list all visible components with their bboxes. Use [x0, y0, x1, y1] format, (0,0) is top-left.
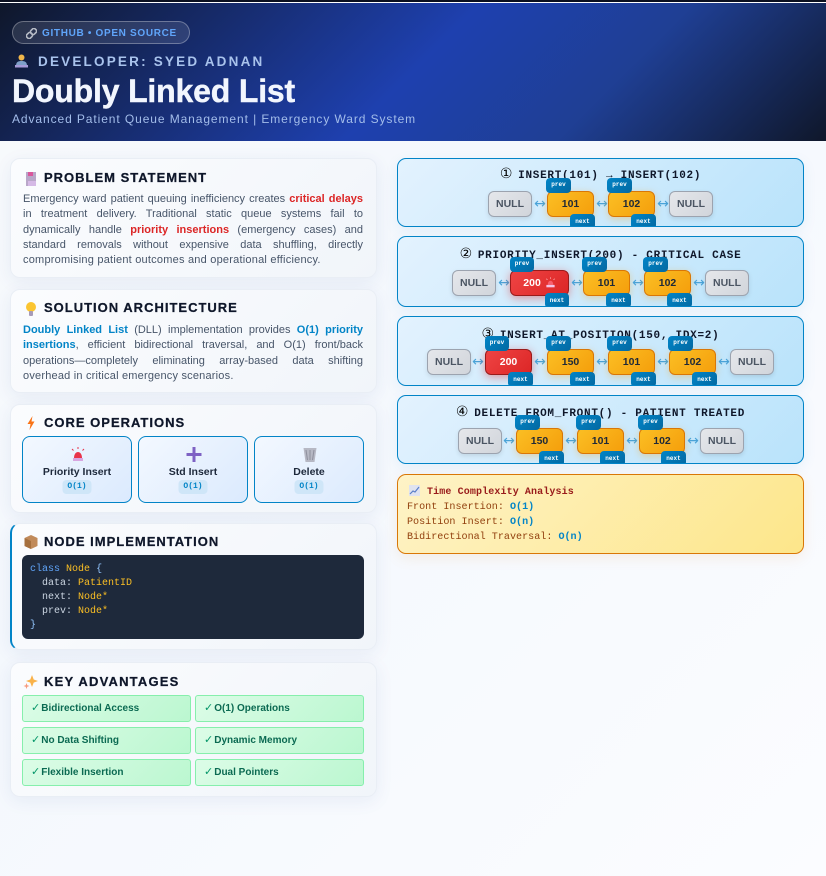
panel: delete from front diagram: next [666, 455, 681, 462]
icon: developer [15, 54, 28, 68]
node: 200 critical: 200 [523, 277, 541, 289]
icon: chart [409, 485, 420, 496]
arrow: ↔ [657, 196, 669, 212]
panel: priority insert diagram: prev [587, 260, 602, 267]
step title: ② PRIORITY_INSERT(200) - CRITICAL CASE [460, 246, 741, 262]
arrow: ↔ [565, 433, 577, 449]
heading: PROBLEM STATEMENT [44, 170, 207, 185]
arrow: ↔ [503, 433, 515, 449]
solution text: insertions, efficient bidirectional traversal, and O(1) front/back [23, 339, 363, 351]
advantage item: ✓Dynamic Memory [204, 733, 297, 746]
complexity tag [62, 480, 92, 494]
code block [22, 555, 364, 639]
problem text: in treatment delivery. Traditional static queue systems fail to [23, 208, 363, 220]
advantage item [195, 727, 364, 754]
arrow: ↔ [534, 354, 546, 370]
solution text [23, 324, 363, 382]
panel: insert at position diagram: prev [490, 339, 504, 346]
advantage item: ✓Dual Pointers [204, 765, 279, 778]
operation: delete [254, 436, 364, 503]
panel: priority insert diagram [397, 236, 804, 307]
subtitle: Advanced Patient Queue Management | Emergency Ward System [12, 112, 416, 126]
arrow: ↔ [718, 354, 730, 370]
panel: key advantages [10, 662, 377, 797]
advantage item: ✓Flexible Insertion [31, 765, 123, 778]
step title: ① INSERT(101) → INSERT(102) [500, 166, 701, 182]
panel: node implementation [10, 523, 377, 650]
node: null: NULL [435, 356, 463, 368]
advantage item [22, 695, 191, 722]
panel: priority insert diagram: next [611, 297, 626, 304]
icon: sparkles [24, 675, 38, 689]
panel: time complexity analysis [397, 474, 804, 554]
panel: insert at position diagram: prev [551, 339, 566, 346]
icon: wastebasket [304, 448, 316, 462]
heading: KEY ADVANTAGES [44, 674, 180, 689]
problem text: standard removals without expensive data shuffling, directly [23, 239, 363, 251]
problem text [23, 193, 363, 266]
panel: delete from front diagram: prev [520, 418, 535, 425]
node: 101 [603, 336, 660, 385]
node: 150 [511, 415, 568, 463]
solution text: Doubly Linked List (DLL) implementation provides O(1) priority [23, 324, 363, 336]
node: 102: 102 [653, 435, 671, 447]
complexity tag [178, 480, 208, 494]
panel: solution architecture [10, 289, 377, 393]
complexity tag: O(1) [67, 482, 87, 491]
arrow: ↔ [632, 275, 644, 291]
node: 101: 101 [598, 277, 615, 289]
analysis title: Time Complexity Analysis [427, 487, 574, 498]
node: null: NULL [496, 198, 524, 210]
node: 101 [542, 178, 599, 226]
icon: plus [186, 447, 202, 462]
arrow: ↔ [596, 354, 608, 370]
panel: delete from front diagram [397, 395, 804, 464]
panel: insert at position diagram [397, 316, 804, 386]
step title: ③ INSERT_AT_POSITION(150, IDX=2) [482, 326, 719, 342]
node: 200: 200 [500, 356, 517, 368]
node: 102 [639, 257, 696, 306]
arrow: ↔ [626, 433, 638, 449]
node: null: NULL [738, 356, 766, 368]
code block: class Node { data: PatientID next: Node* prev: Node* } [30, 564, 132, 631]
arrow: ↔ [534, 196, 546, 212]
problem text: compromising patient outcomes and operational efficiency. [23, 254, 321, 266]
arrow: ↔ [571, 275, 583, 291]
heading: SOLUTION ARCHITECTURE [44, 300, 238, 315]
github badge [12, 21, 190, 44]
icon: link [26, 28, 37, 39]
panel: insert at position diagram: next [697, 376, 712, 383]
panel: delete from front diagram: prev [643, 418, 658, 425]
node: null: NULL [713, 277, 741, 289]
title: Doubly Linked List [12, 73, 295, 109]
panel: priority insert diagram: next [672, 297, 687, 304]
panel: delete from front diagram: next [544, 455, 559, 462]
panel: insert at position diagram: next [513, 376, 528, 383]
node: 101: 101 [623, 356, 640, 368]
node: null: NULL [708, 435, 736, 447]
panel: insert diagram: prev [551, 181, 566, 188]
solution text: operations—completely eliminating array-based data shifting [23, 355, 363, 367]
advantage item: ✓Bidirectional Access [31, 701, 139, 714]
label: Delete [293, 466, 325, 478]
node: 102 [664, 336, 721, 385]
solution text: overhead in critical emergency scenarios. [23, 370, 234, 382]
panel: insert at position diagram: prev [612, 339, 627, 346]
panel: delete from front diagram: next [605, 455, 620, 462]
advantage item [22, 727, 191, 754]
node: 101: 101 [562, 198, 579, 210]
panel: delete from front diagram: prev [581, 418, 596, 425]
panel: insert diagram: prev [612, 181, 627, 188]
panel: insert diagram: next [575, 218, 590, 225]
icon: lightning [28, 416, 34, 430]
label: Std Insert [169, 466, 217, 478]
advantage item [195, 759, 364, 786]
heading: CORE OPERATIONS [44, 415, 185, 430]
complexity line: Position Insert: O(n) [407, 517, 534, 528]
problem text: dynamically handle priority insertions (emergency cases) and [23, 224, 363, 236]
arrow: ↔ [693, 275, 705, 291]
complexity tag [294, 480, 324, 494]
arrow: ↔ [687, 433, 699, 449]
node: 102 [634, 415, 690, 463]
panel: insert diagram [397, 158, 804, 227]
complexity line: Front Insertion: O(1) [407, 502, 534, 513]
panel: problem statement [10, 158, 377, 278]
node: 150: 150 [531, 435, 548, 447]
panel: insert at position diagram: prev [673, 339, 688, 346]
node: 102: 102 [684, 356, 701, 368]
icon: package [24, 535, 38, 549]
arrow: ↔ [657, 354, 669, 370]
node: 101: 101 [592, 435, 609, 447]
panel: priority insert diagram: prev [515, 260, 529, 267]
arrow: ↔ [596, 196, 608, 212]
advantage item: ✓O(1) Operations [204, 701, 290, 714]
badge label: GITHUB • OPEN SOURCE [42, 28, 177, 39]
developer credit: DEVELOPER: SYED ADNAN [38, 54, 264, 69]
complexity tag: O(1) [183, 482, 203, 491]
icon: light bulb [26, 302, 36, 316]
node: 200 critical [504, 257, 575, 306]
advantage item: ✓No Data Shifting [31, 733, 119, 746]
panel: priority insert diagram: next [550, 297, 564, 304]
node: null: NULL [460, 277, 488, 289]
panel: priority insert diagram: prev [648, 260, 663, 267]
step title: ④ DELETE_FROM_FRONT() - PATIENT TREATED [456, 404, 745, 420]
operation: std insert [138, 436, 248, 503]
complexity tag: O(1) [299, 482, 319, 491]
heading: NODE IMPLEMENTATION [44, 534, 219, 549]
node: 150: 150 [562, 356, 579, 368]
advantage item [195, 695, 364, 722]
label: Priority Insert [43, 466, 111, 478]
panel: insert diagram: next [636, 218, 651, 225]
node: null: NULL [466, 435, 494, 447]
arrow: ↔ [498, 275, 510, 291]
icon: siren [72, 447, 84, 461]
problem text: Emergency ward patient queuing inefficiency creates critical delays [23, 193, 363, 205]
node: 102 [603, 178, 660, 226]
node: 200 [479, 336, 538, 385]
operation: priority insert [22, 436, 132, 503]
panel: insert at position diagram: next [575, 376, 590, 383]
advantage item [22, 759, 191, 786]
node: null: NULL [677, 198, 705, 210]
node: 150 [542, 336, 599, 385]
icon: memo [26, 172, 36, 186]
node: 102: 102 [659, 277, 676, 289]
panel: core operations [10, 404, 377, 513]
node: 101 [572, 415, 629, 463]
node: 101 [578, 257, 635, 306]
node: 102: 102 [623, 198, 640, 210]
panel: insert at position diagram: next [636, 376, 651, 383]
header banner [0, 0, 826, 141]
arrow: ↔ [472, 354, 484, 370]
complexity line: Bidirectional Traversal: O(n) [407, 532, 583, 543]
